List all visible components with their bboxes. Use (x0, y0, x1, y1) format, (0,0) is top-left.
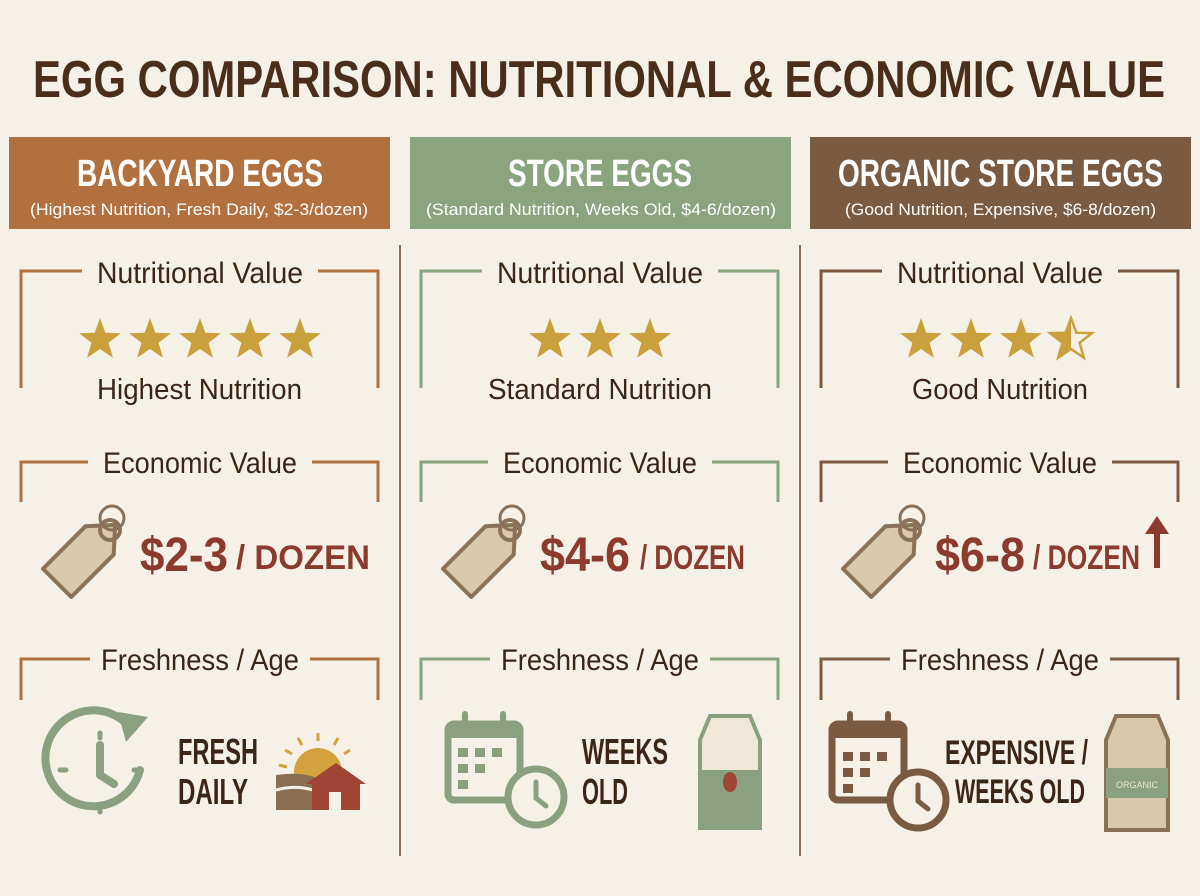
icon: organic carton (1106, 716, 1168, 830)
header: backyard eggs: (Highest Nutrition, Fresh Daily, $2-3/dozen) (30, 200, 368, 219)
panel: organic column: EXPENSIVE / (945, 734, 1088, 772)
icon: tag (843, 506, 929, 597)
panel: backyard column: Nutritional Value (97, 257, 303, 290)
stars: 3.5 (900, 318, 1092, 358)
panel: organic column: Nutritional Value (897, 257, 1103, 290)
icon: organic carton: ORGANIC (1116, 780, 1158, 790)
price (540, 529, 745, 582)
header: backyard eggs (9, 137, 390, 229)
price (140, 529, 370, 582)
panel: store column (421, 257, 778, 828)
panel: backyard column: Economic Value (103, 447, 297, 480)
panel: organic column: WEEKS OLD (955, 773, 1085, 811)
panel: store column: Standard Nutrition (488, 374, 712, 406)
price: $6-8 (935, 529, 1025, 582)
panel: store column: Freshness / Age (501, 644, 699, 677)
header: store eggs (410, 137, 791, 229)
arrow up (1145, 516, 1169, 568)
header: organic store eggs (810, 137, 1191, 229)
price: $2-3 (140, 529, 228, 582)
header: store eggs: STORE EGGS (508, 153, 692, 195)
icon: calendar clock (448, 714, 564, 825)
header: backyard eggs: BACKYARD EGGS (77, 153, 323, 195)
price: / DOZEN (236, 539, 370, 577)
panel: store column: WEEKS (582, 731, 668, 772)
stars: 5 (79, 318, 321, 358)
panel: backyard column: Highest Nutrition (97, 374, 302, 406)
panel: store column: OLD (582, 771, 628, 812)
panel: organic column: Economic Value (903, 447, 1097, 480)
header: store eggs: (Standard Nutrition, Weeks Old, $4-6/dozen) (426, 200, 776, 219)
stars: 3 (529, 318, 671, 358)
panel: backyard column (21, 257, 378, 812)
panel: store column: Economic Value (503, 447, 697, 480)
price (935, 529, 1140, 582)
icon: calendar clock (832, 714, 946, 828)
panel: organic column (821, 257, 1178, 830)
panel: organic column: Freshness / Age (901, 644, 1099, 677)
header: organic store eggs: (Good Nutrition, Expensive, $6-8/dozen) (845, 200, 1156, 219)
icon: farm (276, 733, 366, 810)
icon: tag (443, 506, 529, 597)
panel: backyard column: DAILY (178, 771, 248, 812)
panel: backyard column: FRESH (178, 731, 258, 772)
icon: tag (43, 506, 129, 597)
panel: backyard column: Freshness / Age (101, 644, 299, 677)
panel: store column: Nutritional Value (497, 257, 703, 290)
panel: organic column: Good Nutrition (912, 374, 1088, 406)
icon: carton (700, 716, 760, 828)
price: / DOZEN (640, 539, 745, 577)
icon: clock (45, 710, 148, 812)
price: $4-6 (540, 529, 630, 582)
price: / DOZEN (1033, 539, 1140, 577)
